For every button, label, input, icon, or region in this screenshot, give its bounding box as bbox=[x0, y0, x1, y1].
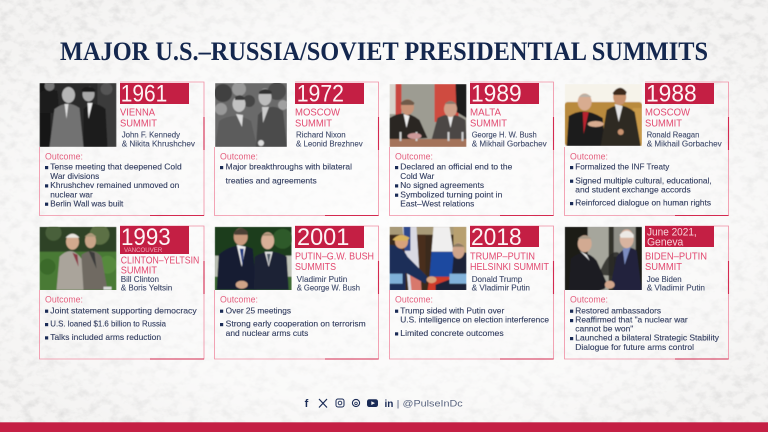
summit name bbox=[470, 251, 549, 273]
outcome list: Joint statement supporting democracy bbox=[50, 306, 198, 315]
outcome list: Outcome: bbox=[570, 151, 608, 161]
outcome list: Major breakthroughs with bilateral bbox=[226, 163, 352, 172]
outcome list: Berlin Wall was built bbox=[50, 199, 124, 208]
year badge with location bbox=[120, 224, 189, 254]
summit name: SUMMIT bbox=[645, 262, 682, 273]
summit name: BIDEN–PUTIN bbox=[645, 251, 707, 262]
year badge: 1988 bbox=[646, 81, 697, 108]
outcome list: and student exchange accords bbox=[575, 185, 691, 194]
icon: facebook: f bbox=[305, 398, 309, 410]
leaders: Bill Clinton bbox=[121, 275, 159, 284]
summit name: SUMMIT bbox=[470, 119, 507, 130]
leaders: & Vladimir Putin bbox=[472, 284, 530, 293]
outcome list: Tense meeting that deepened Cold bbox=[50, 163, 182, 172]
photo: Biden and Putin bbox=[564, 226, 642, 290]
outcome list: nuclear war bbox=[50, 190, 93, 199]
date badge bbox=[645, 226, 714, 249]
photo: Bush and Gorbachev bbox=[390, 84, 466, 147]
summit name: TRUMP–PUTIN bbox=[470, 251, 535, 262]
outcome list: War divisions bbox=[50, 172, 99, 181]
outcome list: Strong early cooperation on terrorism bbox=[226, 320, 366, 329]
outcome list: Symbolized turning point in bbox=[400, 190, 503, 199]
panel: 1993 Vancouver summit bbox=[40, 224, 204, 359]
outcome list: and nuclear arms cuts bbox=[226, 329, 308, 338]
leaders: Ronald Reagan bbox=[647, 131, 700, 140]
year badge: 2001 bbox=[297, 224, 349, 251]
year badge with location: 1993 bbox=[121, 224, 171, 251]
summit name: SUMMITS bbox=[295, 262, 336, 273]
leaders: Donald Trump bbox=[472, 275, 523, 284]
leaders: Vladimir Putin bbox=[297, 275, 348, 284]
footer bar bbox=[0, 422, 768, 432]
summit name: MOSCOW bbox=[295, 108, 341, 119]
outcome list: Limited concrete outcomes bbox=[400, 329, 504, 338]
outcome list: Outcome: bbox=[220, 295, 258, 305]
summit name: HELSINKI SUMMIT bbox=[470, 262, 549, 273]
summit name: PUTIN–G.W. BUSH bbox=[295, 251, 374, 262]
outcome list: Talks included arms reduction bbox=[50, 333, 161, 342]
title: MAJOR U.S.–RUSSIA/SOVIET PRESIDENTIAL SUMMITS bbox=[60, 37, 708, 66]
outcome list: Declared an official end to the bbox=[400, 163, 513, 172]
leaders bbox=[297, 275, 360, 293]
panel: 1961 Vienna summit bbox=[40, 81, 204, 215]
year badge: 1989 bbox=[471, 81, 522, 108]
outcome list: Outcome: bbox=[45, 151, 83, 161]
summit name bbox=[645, 251, 707, 273]
leaders: George H. W. Bush bbox=[472, 131, 537, 140]
year badge: 1972 bbox=[297, 81, 344, 108]
year badge: 1961 bbox=[121, 81, 167, 108]
outcome list bbox=[570, 295, 720, 352]
outcome list: Restored ambassadors bbox=[575, 306, 661, 315]
year badge: 2018 bbox=[471, 224, 522, 251]
summit name bbox=[470, 108, 507, 130]
summit name: SUMMIT bbox=[295, 119, 332, 130]
outcome list: treaties and agreements bbox=[226, 176, 317, 185]
outcome list bbox=[395, 151, 513, 208]
leaders bbox=[647, 131, 723, 148]
outcome list bbox=[45, 151, 182, 208]
summit name: MALTA bbox=[470, 108, 501, 119]
summit name: MOSCOW bbox=[645, 108, 691, 119]
leaders: Joe Biden bbox=[647, 275, 682, 284]
photo: Trump and Putin bbox=[390, 226, 466, 290]
summit name bbox=[295, 108, 341, 130]
year badge with location: VANCOUVER bbox=[124, 248, 163, 254]
leaders: Richard Nixon bbox=[296, 131, 346, 140]
outcome list: U.S. loaned $1.6 billion to Russia bbox=[50, 320, 166, 329]
date badge: June 2021, bbox=[647, 227, 697, 239]
icon: linkedin: in bbox=[384, 399, 393, 410]
outcome list: Outcome: bbox=[395, 151, 433, 161]
photo: Bush and Putin bbox=[214, 226, 292, 290]
leaders: & Nikita Khrushchev bbox=[122, 140, 196, 148]
panel: 1989 Malta summit bbox=[390, 81, 554, 215]
leaders: & Mikhail Gorbachev bbox=[472, 140, 548, 148]
social footer bbox=[305, 398, 463, 410]
icon: youtube bbox=[367, 399, 378, 407]
outcome list: Over 25 meetings bbox=[226, 306, 291, 315]
outcome list: Trump sided with Putin over bbox=[400, 306, 505, 315]
panel: 2001 Putin–Bush summits bbox=[214, 224, 378, 359]
outcome list: Reaffirmed that "a nuclear war bbox=[575, 316, 688, 325]
outcome list: Khrushchev remained unmoved on bbox=[50, 181, 180, 190]
summit name: SUMMIT bbox=[121, 266, 157, 277]
outcome list: Cold War bbox=[400, 172, 435, 181]
leaders bbox=[122, 131, 196, 148]
outcome list: Dialogue for future arms control bbox=[575, 343, 694, 352]
leaders bbox=[472, 131, 548, 148]
outcome list bbox=[45, 295, 198, 342]
outcome list: U.S. intelligence on election interference bbox=[400, 316, 549, 325]
summit name: SUMMIT bbox=[120, 119, 157, 130]
summit name bbox=[121, 255, 199, 277]
leaders: & Vladimir Putin bbox=[647, 284, 705, 293]
outcome list: No signed agreements bbox=[400, 181, 484, 190]
icon: instagram bbox=[336, 399, 344, 407]
outcome list bbox=[570, 151, 712, 208]
outcome list bbox=[220, 151, 352, 185]
date badge: Geneva bbox=[647, 237, 684, 249]
leaders bbox=[121, 275, 173, 292]
panel: 1972 Moscow summit bbox=[214, 81, 378, 215]
outcome list bbox=[220, 295, 366, 338]
panel: 2018 Helsinki summit bbox=[390, 224, 554, 359]
outcome list: East–West relations bbox=[400, 199, 474, 208]
outcome list: Outcome: bbox=[395, 295, 433, 305]
outcome list bbox=[395, 295, 549, 338]
outcome list: Outcome: bbox=[220, 151, 258, 161]
outcome list: Launched a bilateral Strategic Stability bbox=[575, 334, 720, 343]
leaders: & Leonid Brezhnev bbox=[296, 140, 364, 148]
icon: X bbox=[319, 399, 327, 408]
summit name: VIENNA bbox=[120, 108, 155, 119]
summit name bbox=[645, 108, 691, 130]
outcome list: Reinforced dialogue on human rights bbox=[575, 199, 711, 208]
leaders bbox=[472, 275, 530, 293]
leaders: & George W. Bush bbox=[297, 284, 360, 293]
summit name bbox=[120, 108, 157, 130]
leaders: & Mikhail Gorbachev bbox=[647, 140, 723, 148]
icon: threads bbox=[352, 399, 360, 407]
photo: Reagan and Gorbachev bbox=[564, 84, 642, 146]
leaders: & Boris Yeltsin bbox=[121, 283, 173, 292]
leaders bbox=[647, 275, 705, 293]
photo: Clinton and Yeltsin bbox=[40, 226, 116, 290]
outcome list: Outcome: bbox=[45, 295, 83, 305]
outcome list: Signed multiple cultural, educational, bbox=[575, 176, 712, 185]
handle: | @PulseInDc bbox=[397, 399, 463, 410]
outcome list: cannot be won" bbox=[575, 325, 633, 334]
panel: 1988 Moscow summit bbox=[564, 81, 728, 215]
summit name: SUMMIT bbox=[645, 119, 682, 130]
outcome list: Outcome: bbox=[570, 295, 608, 305]
summit name: CLINTON–YELTSIN bbox=[121, 255, 199, 266]
leaders bbox=[296, 131, 364, 148]
panel: 2021 Geneva summit bbox=[564, 226, 728, 359]
outcome list: Formalized the INF Treaty bbox=[575, 163, 670, 172]
summit name bbox=[295, 251, 374, 273]
leaders: John F. Kennedy bbox=[122, 131, 181, 140]
photo: Kennedy and Khrushchev bbox=[40, 83, 116, 147]
photo: Nixon and Brezhnev bbox=[215, 83, 287, 147]
